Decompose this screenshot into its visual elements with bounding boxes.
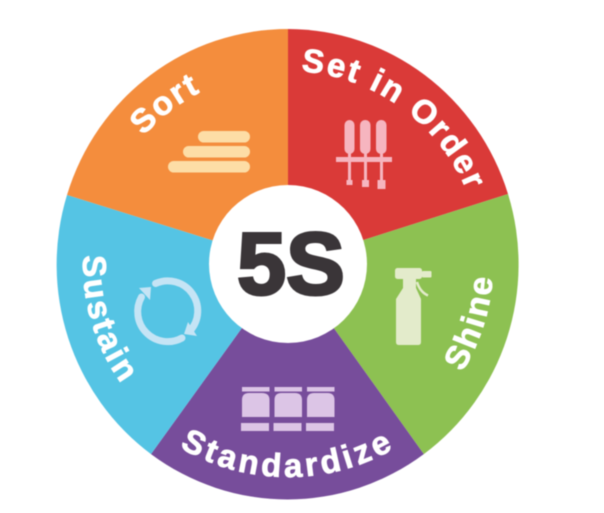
wedge: Sustain [57,195,288,454]
wedge: Set in Order [288,29,508,264]
label: Sort: Sort [130,74,200,134]
wedge: Sort [67,29,288,264]
wedge: Standardize [151,264,424,499]
icon: jars on a shelf [241,387,334,431]
label: Sustain: Sustain [82,255,134,383]
title: 5S: 5S [237,214,345,313]
panel: Set in Order [287,28,508,241]
label: Standardize: Standardize [181,429,392,478]
panel: Sustain [56,194,242,454]
panel: Shine [334,194,520,454]
label: Shine: Shine [444,277,494,370]
icon: cycle arrows [138,281,198,342]
icon: screwdrivers on a rack [336,120,392,189]
panel: Standardize [150,328,424,500]
label: Set in Order: Set in Order [302,48,484,186]
wedge: Shine [288,194,519,454]
panel: 5S wheel [56,28,520,500]
icon: stacked bars [168,131,250,172]
panel: Sort [66,28,289,241]
center circle [209,185,367,343]
icon: spray bottle [395,268,432,345]
